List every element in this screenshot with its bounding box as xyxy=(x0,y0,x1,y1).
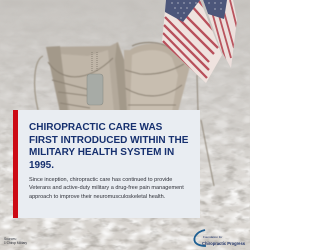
heading: 1995. xyxy=(29,160,54,170)
source note: 1 Chirop Military xyxy=(4,241,27,245)
body text: approach to improve their neuromusculoskeletal health. xyxy=(29,194,165,200)
dog tag xyxy=(87,52,103,105)
logo text: Chiropractic Progress xyxy=(202,240,245,246)
logo text xyxy=(202,235,245,246)
left boot xyxy=(35,42,126,112)
body text xyxy=(29,177,184,200)
heading: CHIROPRACTIC CARE WAS xyxy=(29,122,162,133)
heading: MILITARY HEALTH SYSTEM IN xyxy=(29,147,174,158)
logo: Foundation for Chiropractic Progress xyxy=(194,229,245,247)
icon: American flag xyxy=(160,0,240,86)
heading: FIRST INTRODUCED WITHIN THE xyxy=(29,134,188,146)
background photo: gravel, boots and flag xyxy=(0,0,250,250)
logo text: Foundation for xyxy=(203,235,222,239)
source note xyxy=(4,237,27,245)
icon: flag stars xyxy=(171,2,222,19)
icon: logo arc xyxy=(194,229,206,247)
body text: Since inception, chiropractic care has continued to provide xyxy=(29,177,172,183)
heading xyxy=(29,122,188,170)
right boot xyxy=(115,42,214,186)
body text: Veterans and active-duty military a drug-free pain management xyxy=(29,185,184,191)
source note: Sources: xyxy=(4,237,17,241)
red accent bar xyxy=(13,110,18,218)
panel: text card xyxy=(18,110,200,218)
